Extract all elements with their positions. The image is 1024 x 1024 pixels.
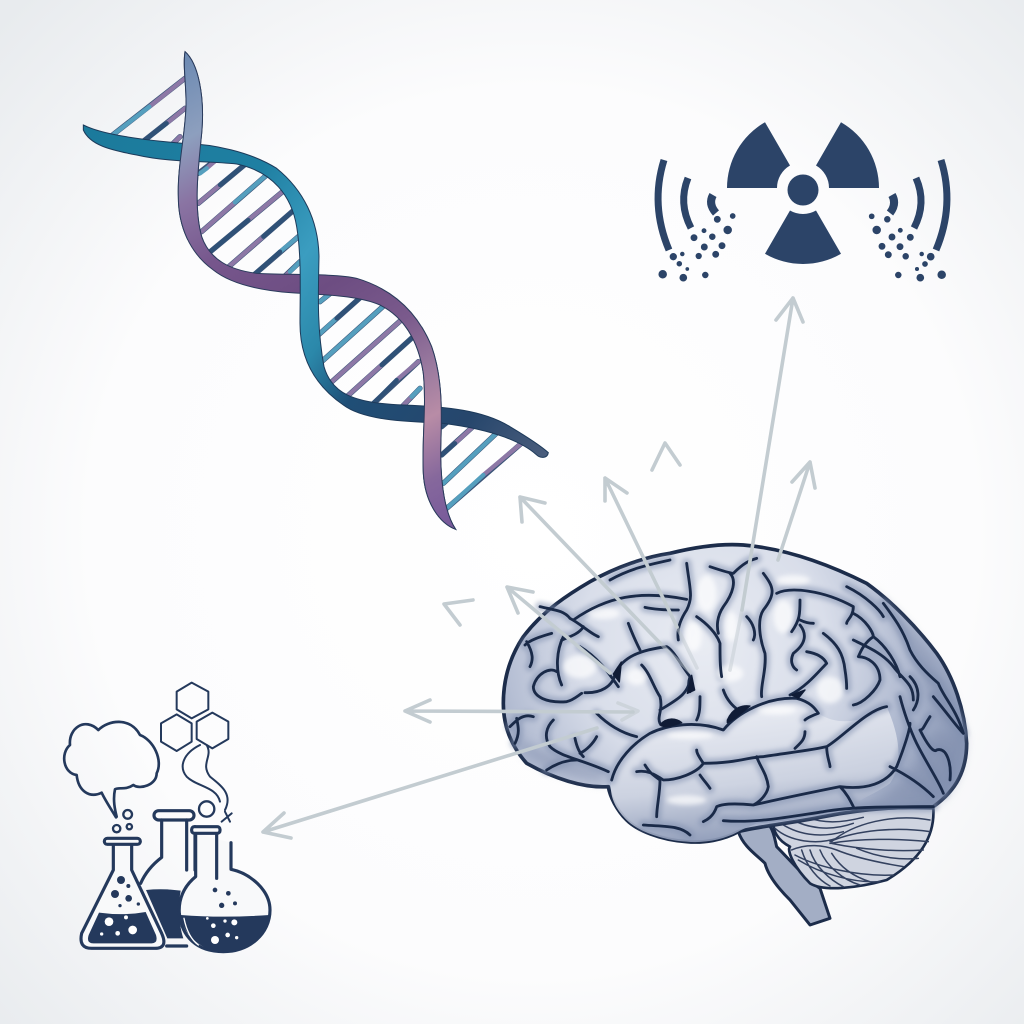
sulci lines: [510, 558, 963, 835]
smoke swirl: [183, 745, 232, 822]
cerebrum body: [503, 545, 967, 842]
rising bubbles: [113, 801, 214, 832]
base pair rungs: [108, 78, 523, 508]
arrow to flasks: [263, 728, 597, 838]
brain: [503, 545, 967, 925]
left particles: [659, 214, 735, 281]
vapour cloud: [64, 722, 159, 817]
DNA double helix: [83, 52, 548, 529]
lower shading: [513, 587, 965, 807]
erlenmeyer flask: [81, 838, 164, 948]
left waves: [658, 160, 716, 250]
radiation symbol with waves and particles: [658, 122, 947, 281]
trefoil: [727, 122, 879, 264]
gyri shading: [510, 558, 963, 835]
arrow to radiation symbol: [730, 298, 803, 670]
detached arrowhead left: [444, 600, 473, 625]
arrow upper left: [507, 587, 610, 673]
gyri highlights: [563, 575, 843, 805]
strand A top crossing: [178, 50, 204, 240]
fissure shadows: [613, 662, 805, 727]
strand A lower layer: [178, 52, 456, 529]
short upward arrow right: [778, 462, 815, 560]
chemical flasks: [64, 683, 270, 952]
cerebellum: [773, 808, 933, 888]
right waves: [890, 160, 947, 250]
arrows radiating from the brain: [263, 298, 815, 838]
detached arrowhead top: [652, 443, 680, 470]
right particles: [869, 214, 946, 281]
strand A bottom crossing: [404, 326, 457, 530]
arrow left: [405, 700, 638, 722]
brainstem: [738, 817, 830, 925]
round bottom flask: [179, 827, 270, 952]
strand B: [83, 125, 548, 457]
arrow upward centre: [605, 478, 697, 668]
molecule hexagons: [161, 683, 228, 751]
middle flask: [141, 811, 195, 946]
temporal lobe: [611, 698, 898, 842]
arrow to DNA: [520, 497, 690, 672]
